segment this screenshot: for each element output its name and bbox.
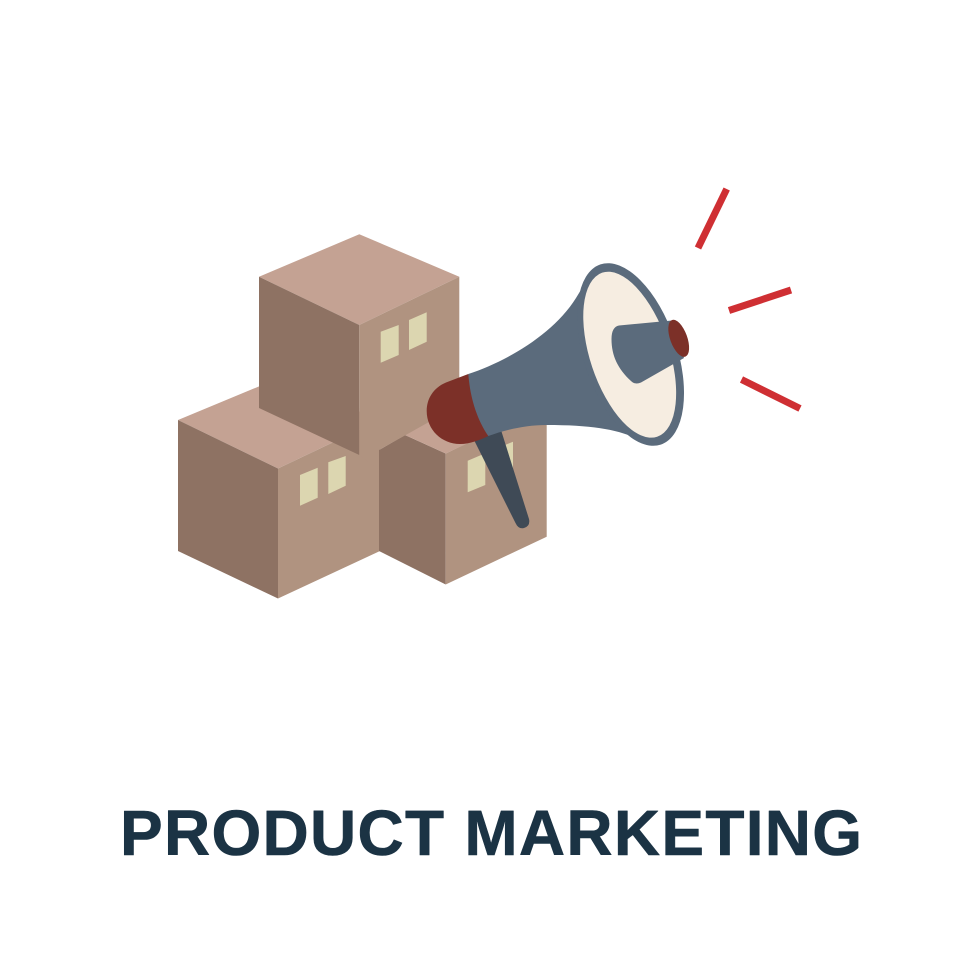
megaphone mouth tip: [664, 317, 693, 360]
megaphone handle: [473, 430, 529, 528]
icon: stacked cardboard boxes: [178, 234, 547, 599]
box: bottom left: [178, 378, 380, 598]
icon: megaphone: [427, 250, 705, 528]
sound line middle: [729, 290, 791, 310]
sound line bottom: [742, 380, 800, 408]
megaphone rear cap: [427, 374, 488, 444]
megaphone bell rim: [556, 250, 705, 459]
box: bottom right: [379, 405, 547, 584]
title: PRODUCT MARKETING: [120, 797, 862, 869]
box: top: [259, 234, 459, 470]
sound line top: [698, 189, 727, 248]
icon: sound lines: [698, 189, 800, 408]
megaphone inner cone: [612, 320, 684, 383]
megaphone horn body: [460, 275, 636, 438]
megaphone bell opening: [565, 260, 695, 449]
